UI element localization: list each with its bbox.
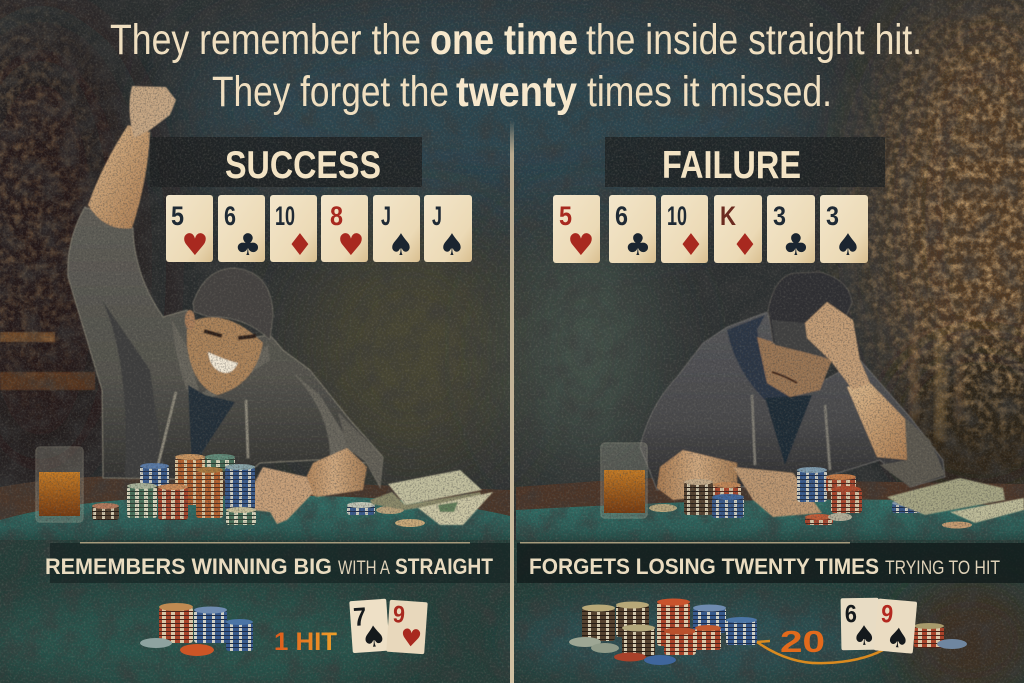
card J spades: ♠ [439, 228, 465, 263]
caption band: success [50, 542, 510, 583]
hoodie body [68, 207, 383, 487]
card 5 hearts: ♥ [182, 228, 208, 263]
raised forearm [88, 125, 150, 229]
lower felt strip [0, 540, 1024, 683]
caption: success: WITH A [338, 558, 390, 579]
hoodie strings [158, 392, 248, 465]
card 6 clubs [609, 195, 656, 263]
hoodie strings [752, 395, 830, 470]
card J spades: ♠ [388, 228, 414, 263]
card 6 clubs: ♣ [625, 228, 651, 263]
card 8 hearts: 8 [330, 201, 343, 231]
chips: twenty misses pile [569, 598, 967, 665]
header band: success [150, 137, 422, 187]
chips: failure table [649, 467, 972, 528]
card 5 hearts: ♥ [568, 228, 594, 263]
card 9 spades: ♠ [884, 622, 911, 655]
arrow: arc under 20 [757, 641, 883, 663]
label: 20: 20 [780, 624, 825, 659]
ear [185, 310, 195, 330]
card 5 hearts: 5 [559, 201, 572, 231]
card K diamonds: K [720, 201, 736, 231]
card 7 spades [349, 599, 390, 655]
title: one time [430, 16, 578, 64]
cap brim [772, 320, 828, 358]
hood [172, 320, 270, 410]
shirt [765, 395, 812, 465]
figure: dejected man [640, 272, 945, 517]
hoodie fold [290, 370, 355, 458]
card K diamonds: ♦ [732, 228, 758, 263]
forearm on table [300, 448, 367, 497]
cards: success hand [166, 195, 472, 263]
card 6 clubs: ♣ [235, 228, 261, 263]
cap [768, 272, 852, 358]
card 6 clubs: 6 [615, 201, 628, 231]
card 6 clubs: 6 [224, 201, 236, 231]
card 10 diamonds [661, 195, 708, 263]
card 10 diamonds [270, 195, 317, 263]
title: twenty [456, 68, 577, 116]
heading: failure: FAILURE [662, 144, 801, 187]
raised forearm [847, 383, 913, 460]
face [187, 317, 263, 395]
card 3 spades [820, 195, 868, 263]
card 6 clubs [218, 195, 265, 263]
sleeve cuff [338, 412, 383, 487]
hand [733, 467, 822, 517]
card J spades [424, 195, 472, 263]
forearm on table [657, 450, 737, 500]
caption: success [45, 554, 493, 579]
card 6 spades: ♠ [852, 621, 877, 652]
hand on head [805, 302, 870, 390]
caption: success: STRAIGHT [395, 554, 493, 579]
title: They remember the [110, 16, 421, 64]
card 3 clubs [767, 195, 815, 263]
title [110, 16, 922, 116]
chips: one hit pile [140, 603, 253, 656]
hoodie body [640, 312, 945, 490]
card 3 clubs: ♣ [783, 228, 809, 263]
eyes [204, 331, 256, 338]
label: 1 hit: 1 HIT [274, 628, 337, 656]
card J spades [373, 195, 420, 263]
caption band: failure [517, 542, 1024, 583]
fist [129, 86, 176, 138]
card 5 hearts [166, 195, 213, 263]
title: They forget the [212, 68, 449, 116]
sleeve [880, 418, 945, 487]
glass: right whisky [601, 443, 647, 518]
heading: success: SUCCESS [225, 144, 381, 187]
money: success table [370, 470, 493, 525]
shirt [188, 385, 235, 470]
card K diamonds [714, 195, 762, 263]
cards: 7 and 9 [349, 599, 428, 655]
figure: celebrating man [68, 86, 383, 524]
card J spades: J [381, 201, 391, 231]
card 10 diamonds: ♦ [678, 228, 704, 263]
cards: failure hand [553, 195, 868, 263]
card 9 hearts: ♥ [400, 624, 423, 653]
card 3 spades: 3 [826, 201, 839, 231]
cards: 6 and 9 [841, 598, 917, 656]
panel: success table [0, 476, 510, 548]
card 3 clubs: 3 [773, 201, 786, 231]
card 8 hearts: ♥ [338, 228, 364, 263]
card 9 hearts: 9 [392, 601, 406, 629]
card 6 spades [841, 598, 879, 652]
caption: failure: TRYING TO HIT [885, 558, 1000, 579]
card 6 spades: 6 [845, 600, 857, 628]
hand [245, 467, 313, 524]
centre divider [510, 120, 514, 683]
card 9 spades: 9 [880, 600, 894, 629]
card 5 hearts [553, 195, 600, 263]
card 5 hearts: 5 [171, 201, 184, 231]
panel: failure table [516, 478, 1024, 548]
hood [727, 315, 800, 400]
card 7 spades: 7 [352, 601, 367, 632]
glass: left whisky [36, 447, 83, 522]
title: times it missed. [587, 68, 832, 116]
caption: success: REMEMBERS WINNING BIG [45, 554, 332, 579]
card 10 diamonds: 10 [667, 201, 687, 231]
mouth [772, 372, 797, 383]
mouth [208, 352, 238, 373]
cap [193, 268, 273, 340]
card 8 hearts [321, 195, 368, 263]
hoodie shading [102, 300, 165, 478]
face [757, 337, 832, 397]
card 3 spades: ♠ [835, 228, 861, 263]
money: failure table [887, 478, 1024, 523]
card J spades: J [432, 201, 442, 231]
card 10 diamonds: ♦ [287, 228, 313, 263]
header band: failure [605, 137, 885, 187]
caption: failure: FORGETS LOSING TWENTY TIMES [529, 554, 879, 579]
card 9 hearts [386, 600, 428, 654]
card 10 diamonds: 10 [275, 201, 295, 231]
card 9 spades [874, 598, 917, 656]
card 7 spades: ♠ [360, 619, 388, 654]
chips: success table [92, 454, 425, 527]
title: the inside straight hit. [586, 16, 922, 64]
